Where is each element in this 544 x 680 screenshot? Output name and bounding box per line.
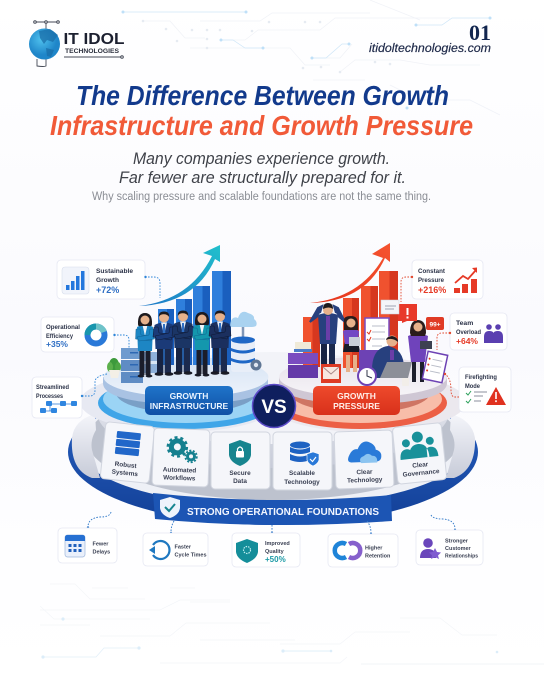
right platform rings [266,372,466,432]
benefit: stronger customer relationships: Customer [445,546,472,552]
title [50,80,473,141]
card: operational efficiency: Operational [46,324,80,331]
decorative circuit pattern top [123,0,500,115]
card: clear technology [334,430,394,489]
benefit: higher retention: Retention [365,554,391,560]
card: firefighting mode [459,367,511,412]
label: growth infrastructure: GROWTH [170,391,208,401]
connector lines: upper [81,276,459,397]
decorative circuit pattern bottom [40,584,544,664]
website: itidoltechnologies.com [369,41,491,55]
card: scalable technology: Scalable [289,470,315,477]
card: automated workflows [152,428,210,487]
icon: database shield [290,442,310,462]
card: secure data: Secure [229,470,251,477]
card: streamlined processes: Processes [36,393,63,400]
logo: TECHNOLOGIES [65,48,119,55]
benefit: improved quality: +50% [265,555,286,564]
card: operational efficiency: +35% [46,339,68,349]
card: team overload: +64% [456,336,478,346]
icon: cloud [347,441,382,463]
card: sustainable growth: Growth [96,277,119,284]
banner: strong operational foundations: STRONG OPERATIONAL FOUNDATIONS [187,506,379,518]
outer ring walls [72,414,100,478]
page number: 01 [469,20,491,45]
icon: server stack [121,348,157,383]
card: robust systems: Systems [111,469,139,478]
card: constant pressure: Constant [418,268,446,275]
card: constant pressure: +216% [418,285,446,295]
icon: cycle arrow [149,541,169,559]
icon: warning triangle [486,387,506,405]
stressed man holding head [310,303,345,366]
logo wordmark: IT IDOL [64,31,125,48]
benefit: faster cycle times: Cycle Times [174,552,207,558]
card: streamlined processes [32,377,82,418]
benefit: fewer delays [58,528,117,563]
label: growth infrastructure [145,386,233,415]
woman with tablet [343,316,360,372]
title: The Difference Between Growth [76,80,449,111]
title: Infrastructure and Growth Pressure [50,110,473,141]
connector lines: lower [87,512,456,535]
message card [381,300,399,314]
centre white tier [97,352,449,468]
banner: strong operational foundations [153,493,392,525]
checklist board [365,318,389,354]
card: clear technology: Clear [356,469,373,476]
benefit: improved quality: Improved [265,541,290,547]
icon: customer with star [420,538,441,559]
icon: shield check [160,497,180,518]
card: team overload [450,313,507,350]
label: growth pressure [313,386,400,415]
blue base platform [68,379,478,525]
VS badge: VS [261,397,287,418]
icon: servers [115,431,141,456]
icon: people group [398,430,438,460]
icon: overloaded team [484,324,503,343]
card: sustainable growth: Sustainable [96,268,133,275]
label: growth pressure: GROWTH [337,391,376,401]
99+ badge: 99+ [429,322,441,328]
icon: rising bars [454,268,477,293]
benefit: higher retention: Higher [365,546,383,552]
icon: bar chart [62,267,89,294]
arrow: red pressure [310,243,390,303]
card: clear technology: Technology [347,476,383,485]
label: growth pressure: PRESSURE [333,401,380,411]
card: firefighting mode: Firefighting [465,374,497,381]
card: sustainable growth [57,260,145,299]
card: scalable technology [273,432,332,490]
subtitle [119,149,406,187]
benefit: faster cycle times: Faster [174,544,192,550]
card: firefighting mode: Mode [465,383,480,390]
alert bubble [398,304,417,323]
icon: cloud and database [230,312,262,372]
icon: calendar [65,535,85,557]
card: constant pressure [412,260,483,299]
benefit: fewer delays: Fewer [92,542,109,548]
icon: retention loop [335,543,360,558]
card: team overload: Team [456,320,473,327]
card: secure data: Data [233,478,247,485]
envelope box [321,364,341,383]
card: automated workflows: Automated [163,466,196,475]
team: five professionals [136,310,231,378]
icon: gears [167,437,197,462]
bar chart: growth infrastructure [158,271,231,365]
stack of purple files [288,342,318,378]
left platform rings [80,372,280,432]
clipboard [422,351,448,383]
subtitle: Far fewer are structurally prepared for it. [119,168,406,187]
stressed workers and clutter [288,300,448,386]
benefit: faster cycle times [143,533,208,566]
VS badge [252,384,296,428]
icon: donut chart [88,326,104,344]
benefit: improved quality [232,533,300,567]
benefit: higher retention [328,534,398,567]
card: robust systems: Robust [114,461,138,470]
bar chart: growth pressure [303,271,398,368]
logo [29,21,125,66]
card: operational efficiency: Efficiency [46,333,73,340]
card: clear governance: Governance [402,468,440,479]
card: automated workflows: Workflows [163,474,196,483]
icon: shield lock [229,440,251,466]
card: sustainable growth: +72% [96,285,119,295]
arrow: teal growth [139,245,220,306]
card: team overload: Overload [456,329,481,336]
subtitle: Many companies experience growth. [133,149,390,168]
woman with tablet right [408,320,432,382]
benefit: stronger customer relationships: Stronger [445,538,469,544]
card: constant pressure: Pressure [418,277,444,284]
card: streamlined processes: Streamlined [36,384,69,391]
icon: quality shield [236,539,258,563]
99+ badge [426,317,444,330]
icon: checklist [466,391,487,403]
card: clear governance: Clear [412,461,429,470]
clock [358,367,376,385]
card: scalable technology: Technology [284,479,320,486]
right disc [279,357,447,404]
icon: potted plant [107,358,121,378]
card: secure data [211,432,270,489]
benefit: stronger customer relationships: Relationships [445,554,478,560]
supporting line: Why scaling pressure and scalable foundations are not the same thing. [92,191,431,203]
icon: flow diagram [40,401,77,413]
icon: globe [29,28,60,60]
mug [402,378,409,386]
purple boxes [359,350,379,370]
benefit: fewer delays: Delays [92,550,110,556]
seated man at laptop [372,336,412,378]
card: robust systems [100,422,155,483]
benefit: stronger customer relationships [416,530,483,565]
label: growth infrastructure: INFRASTRUCTURE [150,401,229,411]
benefit: improved quality: Quality [265,549,285,555]
left disc [103,357,268,404]
card: operational efficiency [41,317,114,352]
card: clear governance [392,423,447,484]
